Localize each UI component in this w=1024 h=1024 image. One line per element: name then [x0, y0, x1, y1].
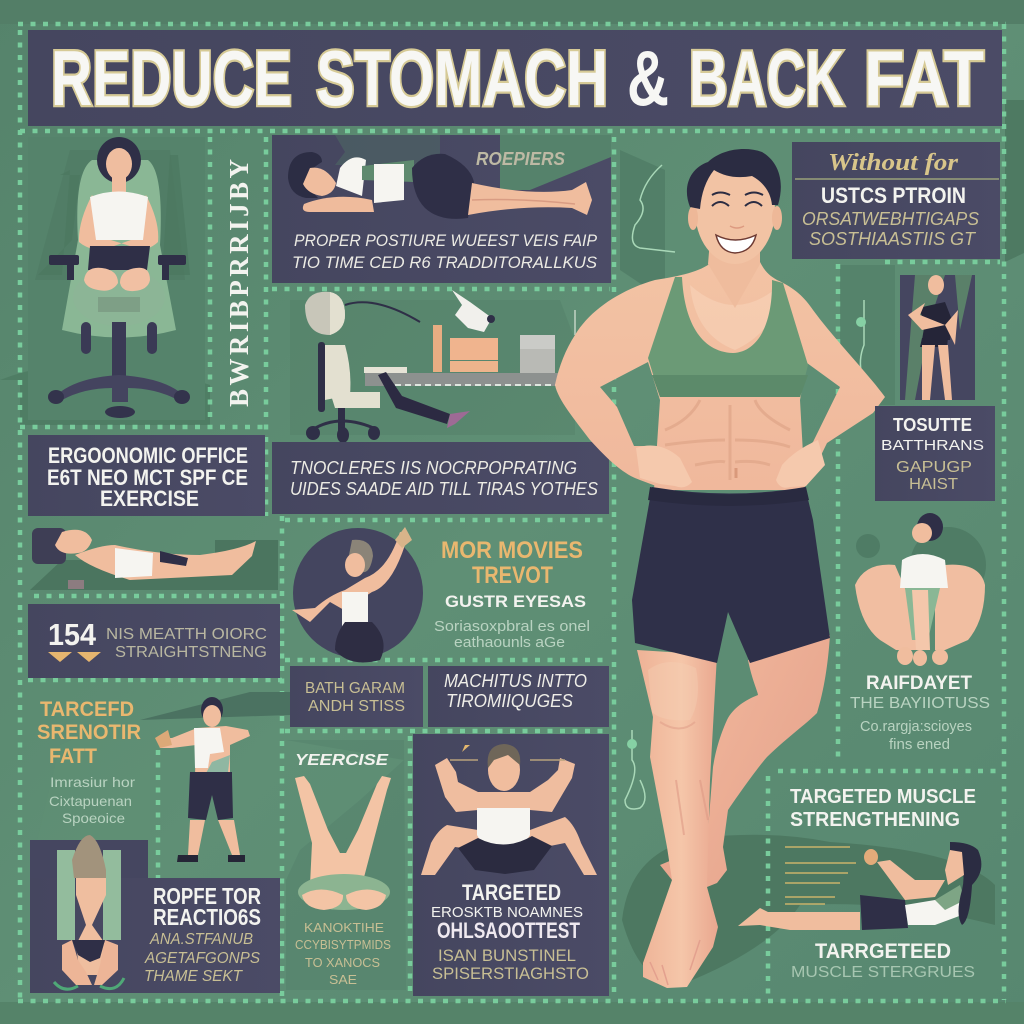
panel: targeted fat: SRENOTIR: [37, 721, 141, 744]
panel: rope for reactions: THAME SEKT: [144, 968, 243, 985]
panel: exercise legs: [286, 740, 406, 990]
desk: [365, 373, 565, 386]
posture text: [292, 231, 598, 272]
floor shadow: [622, 835, 995, 985]
panel: targeted muscle strengthening: [738, 786, 981, 981]
panel: 154 strengthening: STRAIGHTSTNENG: [115, 644, 267, 661]
panel: targeted muscle strengthening: TARGETED MUSCLE: [790, 786, 976, 808]
panel: rope for reactions: REACTIO6S: [153, 904, 261, 930]
panel: squat exercise: fins ened: [889, 736, 950, 753]
panel: tosutte: [875, 406, 995, 501]
decorative motion arrows: [625, 165, 866, 809]
posture text: PROPER POSTIURE WUEEST VEIS FAIP: [294, 231, 598, 250]
panel: 154 strengthening: NIS MEATTH OIORC: [106, 626, 267, 643]
panel: machitus: MACHITUS INTTO: [444, 671, 587, 691]
posture text: TIO TIME CED R6 TRADDITORALLKUS: [292, 253, 598, 272]
title: STOMACH: [316, 34, 608, 122]
panel: without for: ORSATWEBHTIGAPS: [802, 209, 979, 229]
woman: [97, 137, 141, 183]
panel: desk text: [272, 442, 609, 514]
panel: rope for reactions: ANA.STFANUB: [149, 931, 253, 948]
title: REDUCE: [51, 34, 292, 122]
panel: without for: [792, 142, 1000, 259]
panel: without for: USTCS PTROIN: [821, 183, 966, 208]
panel: targeted fat: Spoeoice: [62, 810, 125, 826]
lamp: [452, 290, 492, 332]
neck and face: [708, 240, 760, 308]
squat figure: [855, 513, 985, 666]
panel: targeted seated exercise: [413, 734, 609, 996]
panel: more moves: TREVOT: [472, 562, 553, 589]
panel: more moves: GUSTR EYESAS: [445, 592, 586, 611]
title: FAT: [864, 34, 984, 122]
ribbon pointer: [140, 692, 292, 720]
eyes: [712, 192, 763, 206]
panel: squat exercise: RAIFDAYET: [866, 673, 972, 694]
panel: tosutte: HAIST: [909, 476, 958, 493]
panel: targeted fat: Imrasiur hor: [50, 774, 135, 790]
panel: bath garam: BATH GARAM: [305, 680, 405, 697]
panel: bath garam: ANDH STISS: [308, 698, 405, 715]
triangles: [48, 652, 101, 662]
panel: exercise legs: YEERCISE: [295, 752, 390, 769]
standing man: [155, 697, 250, 862]
torso and arms: [555, 262, 885, 492]
bra top: [648, 277, 808, 397]
panel: targeted muscle strengthening: STRENGTHENING: [790, 809, 960, 831]
panel: squat exercise: Co.rargja:scioyes: [860, 718, 972, 735]
panel: rope for reactions: [30, 835, 280, 993]
panel: desk text: TNOCLERES IIS NOCRPOPRATING: [290, 458, 577, 478]
hands: [636, 446, 692, 487]
chair silhouette: [38, 155, 190, 275]
panel: squat exercise: THE BAYIIOTUSS: [850, 695, 990, 712]
panel: bath garam: [290, 666, 423, 727]
panel: ergonomic office: EXERCISE: [100, 486, 199, 511]
posture label: ROEPIERS: [476, 149, 565, 169]
panel: targeted seated exercise: ISAN BUNSTINEL: [438, 946, 576, 965]
panel: targeted fat: Cixtapuenan: [49, 793, 132, 809]
panel: exercise legs: TO XANOCS: [305, 956, 380, 970]
main figure: [555, 149, 885, 988]
panel: ergonomic office: ERGOONOMIC OFFICE: [48, 443, 248, 468]
front leg: [637, 650, 718, 988]
panel: targeted seated exercise: SPISERSTIAGHSTO: [432, 964, 589, 983]
panel: more moves: MOR MOVIES: [441, 537, 583, 564]
panel: tosutte: GAPUGP: [896, 459, 972, 476]
panel: small standing figure: [900, 275, 975, 400]
panel: 154 strengthening: 154: [48, 617, 97, 652]
raised legs: [295, 776, 391, 910]
seated figure: [421, 744, 597, 875]
speed lines: [785, 847, 856, 904]
panel: without for: Without for: [828, 150, 959, 176]
panel: targeted fat: FATT: [49, 745, 97, 768]
back leg: [707, 635, 830, 887]
panel: office desk scene: [290, 290, 575, 443]
panel: rope for reactions: ROPFE TOR: [153, 883, 261, 909]
panel: rope for reactions: AGETAFGONPS: [144, 950, 260, 967]
panel: lying stretch: [30, 528, 278, 590]
title: &: [627, 34, 669, 122]
circle illustration: [292, 527, 423, 662]
panel: more moves: [292, 527, 590, 662]
vertical label: BWRIBPRRIJBY: [224, 159, 254, 407]
title panel: [28, 30, 1002, 126]
panel: ergonomic office: E6T NEO MCT SPF CE: [47, 465, 248, 490]
panel: proper posture: [272, 135, 611, 283]
legs: [364, 367, 407, 373]
hair: [687, 149, 781, 209]
panel: targeted muscle strengthening: MUSCLE STERGRUES: [791, 964, 975, 981]
panel: exercise legs: SAE: [329, 973, 357, 987]
panel: more moves: eathaounls aGe: [454, 634, 565, 651]
smile: [716, 235, 756, 253]
panel: targeted fat: TARCEFD: [40, 698, 134, 721]
panel: machitus: TIROMIIQUGES: [446, 691, 573, 711]
panel: targeted seated exercise: EROSKTB NOAMNES: [431, 904, 583, 921]
panel: targeted fat: [30, 697, 250, 878]
abs: [665, 400, 790, 480]
panel: tosutte: TOSUTTE: [893, 415, 972, 435]
panel: more moves: Soriasoxpbral es onel: [434, 618, 590, 635]
lying figure with ball: [738, 842, 981, 930]
panel: tosutte: BATTHRANS: [881, 437, 984, 454]
lying figure: [288, 152, 592, 219]
panel: without for: SOSTHIAASTIIS GT: [809, 229, 977, 249]
inverted figure: [54, 835, 124, 989]
panel: exercise legs: KANOKTIHE: [304, 921, 384, 935]
panel: targeted seated exercise: OHLSAOOTTEST: [437, 918, 580, 943]
panel: desk text: UIDES SAADE AID TILL TIRAS YOTHES: [290, 479, 598, 499]
title: BACK: [689, 34, 844, 122]
panel: ergonomic office: [28, 435, 265, 516]
panel: targeted seated exercise: TARGETED: [462, 880, 561, 905]
title: [51, 34, 984, 122]
office chair: [305, 292, 420, 443]
panel: squat exercise: [850, 513, 990, 753]
panel: seated woman on ergonomic chair: [38, 137, 190, 418]
panel: machitus: [428, 666, 609, 727]
panel: 154 strengthening: [28, 604, 280, 678]
panel: exercise legs: CCYBISYTPMIDS: [295, 938, 391, 952]
shorts: [632, 487, 830, 663]
boxes: [433, 325, 442, 372]
panel: targeted muscle strengthening: TARRGETEED: [815, 940, 951, 963]
